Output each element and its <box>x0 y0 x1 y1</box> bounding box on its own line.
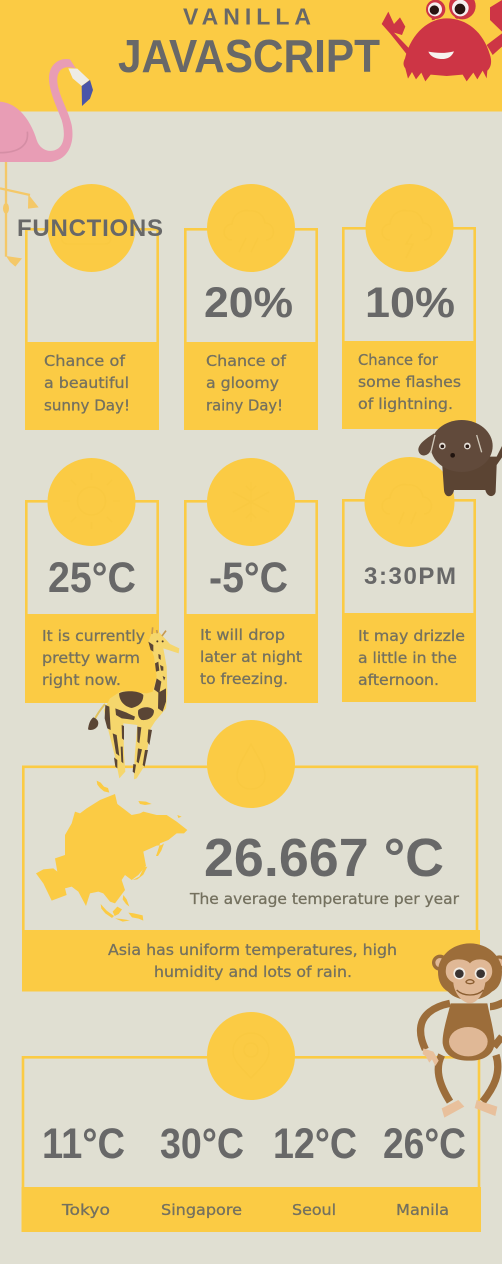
header band <box>0 0 502 112</box>
rainy description: Chance of <box>206 352 287 370</box>
freezing value: -5°C <box>209 554 288 602</box>
city values: 30°C <box>160 1120 244 1168</box>
lightning description: of lightning. <box>358 395 453 413</box>
drizzle time: 3:30PM <box>364 563 456 590</box>
rainy description: rainy Day! <box>206 396 283 414</box>
city values: 11°C <box>42 1120 125 1168</box>
illustration: monkey <box>421 943 502 1118</box>
icon circle: drizzle cloud <box>364 457 454 547</box>
freezing description: later at night <box>200 648 302 666</box>
freezing description <box>200 626 302 688</box>
icon circle: sun <box>48 458 136 546</box>
sunny description: a beautiful <box>44 374 129 392</box>
current temperature description: right now. <box>42 671 121 689</box>
panel: rainy day <box>184 184 318 430</box>
panel: drizzle <box>342 457 476 702</box>
asia description: humidity and lots of rain. <box>154 963 352 981</box>
lightning value: 10% <box>365 279 455 327</box>
panel: lightning <box>342 184 476 429</box>
panel: freezing <box>184 458 318 703</box>
panel: sunny day <box>25 184 159 430</box>
illustration: crab <box>382 0 502 81</box>
city names: Manila <box>396 1201 449 1219</box>
drizzle description <box>358 627 465 689</box>
city names <box>61 1201 449 1219</box>
city values <box>42 1120 466 1168</box>
average temperature value: 26.667 °C <box>204 828 444 888</box>
current temperature description: pretty warm <box>42 649 140 667</box>
freezing description: to freezing. <box>200 670 288 688</box>
title: javascript: JAVASCRIPT <box>118 30 380 82</box>
city names: Tokyo <box>61 1201 110 1219</box>
city names: Seoul <box>292 1201 336 1219</box>
icon circle: sun behind cloud <box>48 184 136 272</box>
average temperature caption: The average temperature per year <box>189 890 460 908</box>
icon circle: snowflake <box>207 458 295 546</box>
drizzle description: afternoon. <box>358 671 439 689</box>
freezing description: It will drop <box>200 626 285 644</box>
rainy description <box>206 352 287 414</box>
current temperature description: It is currently <box>42 627 145 645</box>
heading: functions: FUNCTIONS <box>17 215 163 242</box>
city names: Singapore <box>161 1201 242 1219</box>
current temperature description <box>42 627 145 689</box>
panel: current temperature <box>25 458 159 703</box>
illustration: dog <box>418 420 502 496</box>
lightning description: some flashes <box>358 373 461 391</box>
drizzle description: It may drizzle <box>358 627 465 645</box>
panel: city temperatures <box>22 1012 481 1232</box>
panel: average temperature <box>22 720 480 992</box>
sunny description <box>44 352 130 414</box>
rainy value: 20% <box>204 279 293 327</box>
rainy description: a gloomy <box>206 374 279 392</box>
asia description: Asia has uniform temperatures, high <box>108 941 397 959</box>
sunny description: sunny Day! <box>44 396 130 414</box>
illustration: giraffe <box>88 627 179 779</box>
icon circle: storm cloud <box>366 184 454 272</box>
sunny description: Chance of <box>44 352 126 370</box>
icon circle: water drop <box>207 720 295 808</box>
icon circle: location pin <box>207 1012 295 1100</box>
icon circle: rain cloud <box>207 184 295 272</box>
city values: 12°C <box>273 1120 357 1168</box>
asia description <box>108 941 397 981</box>
lightning description <box>358 351 461 413</box>
current temperature value: 25°C <box>48 554 136 602</box>
drizzle description: a little in the <box>358 649 457 667</box>
lightning description: Chance for <box>358 351 439 369</box>
city values: 26°C <box>383 1120 466 1168</box>
illustration: flamingo <box>0 59 93 267</box>
map of asia <box>36 781 187 922</box>
title: vanilla: VANILLA <box>183 4 311 30</box>
